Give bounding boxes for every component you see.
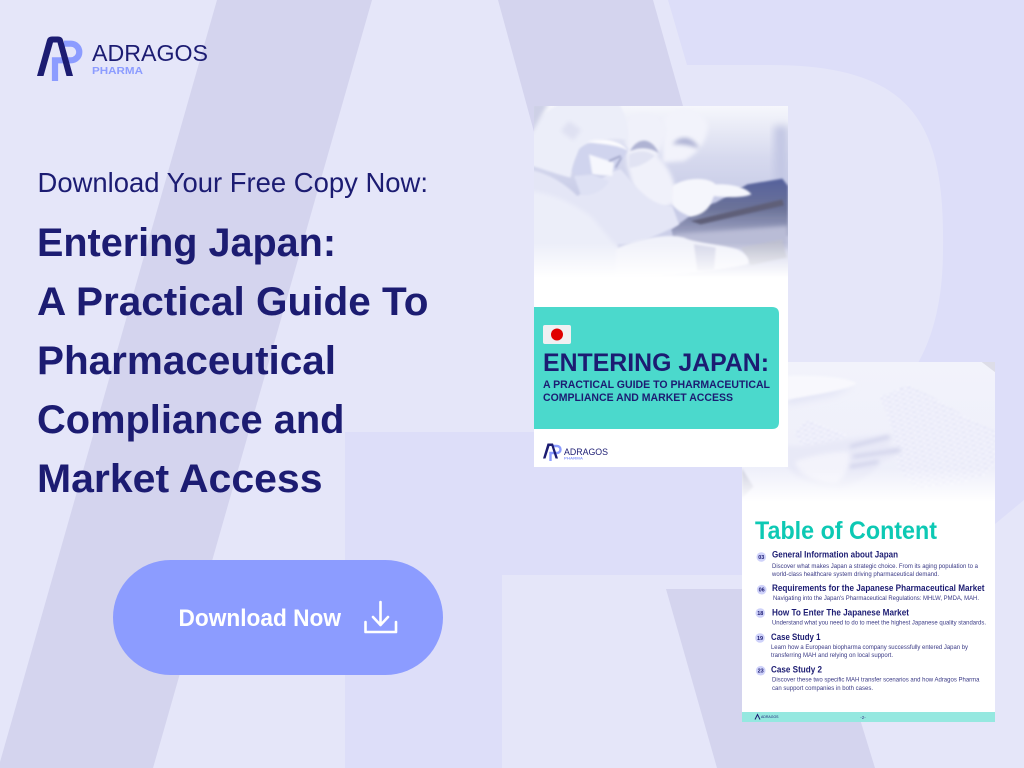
toc entry 06: 06 [759, 588, 765, 594]
photo: gloved hands and pills [742, 362, 995, 495]
eyebrow text: Download Your Free Copy Now: [38, 167, 428, 198]
button label: Download Now [178, 605, 342, 632]
toc entry 19: Case Study 1 [771, 632, 820, 642]
page footer strip [742, 712, 995, 722]
toc entry 23: 23 [758, 669, 764, 675]
toc entry 03: Discover what makes Japan a strategic choice. From its aging population to a [772, 563, 979, 570]
toc entry 23: can support companies in both cases. [772, 685, 873, 692]
cover subtitle: COMPLIANCE AND MARKET ACCESS [543, 392, 733, 404]
cover subtitle [543, 379, 770, 404]
logo subtitle: PHARMA [92, 65, 143, 77]
download button [113, 560, 443, 675]
main heading: Market Access [37, 457, 322, 501]
logo icon [37, 36, 79, 81]
glove arm [672, 179, 751, 217]
page footer strip: ADRAGOS [761, 715, 779, 719]
toc entry 23 [756, 665, 980, 692]
toc entry 19: 19 [757, 636, 763, 642]
toc entry 19: Learn how a European biopharma company successfully entered Japan by [771, 644, 969, 651]
main heading: Compliance and [37, 398, 344, 442]
person 1 body [534, 170, 680, 246]
back page: table of content [742, 362, 995, 722]
background: letter A left leg [0, 0, 372, 768]
main heading: Pharmaceutical [37, 339, 336, 383]
cover title panel [534, 307, 779, 429]
cover logo: PHARMA [564, 456, 583, 460]
toc entry 18: Understand what you need to do to meet the highest Japanese quality standards. [772, 620, 986, 627]
toc entry 18: How To Enter The Japanese Market [772, 608, 909, 618]
cover logo [543, 444, 608, 461]
face and mask [577, 143, 628, 156]
front cover [527, 101, 788, 467]
toc entry 18: 18 [757, 611, 763, 617]
cover title: ENTERING JAPAN: [543, 349, 769, 377]
icon: japan flag [543, 325, 571, 344]
toc entry 19 [755, 632, 969, 659]
person 2 [626, 129, 675, 206]
foreground arm [618, 235, 749, 268]
toc entry 23: Case Study 2 [771, 665, 822, 675]
cover photo: cleanroom workers [534, 106, 788, 272]
toc entry 19: transferring MAH and relying on local support. [771, 652, 893, 659]
icon: download arrow [366, 602, 396, 632]
main heading [37, 221, 428, 501]
cover subtitle: A PRACTICAL GUIDE TO PHARMACEUTICAL [543, 379, 770, 391]
toc entry 06: Navigating into the Japan's Pharmaceutical Regulations: MHLW, PMDA, MAH. [773, 595, 979, 602]
fade to white [534, 247, 788, 278]
toc entry 18 [756, 608, 986, 627]
main heading: Entering Japan: [37, 221, 336, 265]
page footer strip: -2- [860, 715, 866, 720]
toc entry 03 [756, 550, 979, 578]
toc heading: Table of Content [755, 517, 938, 545]
logo wordmark: ADRAGOS [92, 40, 208, 66]
toc entry 06 [757, 583, 984, 602]
logo [37, 36, 208, 81]
tray [671, 179, 788, 239]
main heading: A Practical Guide To [37, 280, 428, 324]
cover logo: ADRAGOS [564, 447, 608, 457]
person 3 [662, 126, 706, 164]
hood [534, 106, 622, 178]
toc entry 06: Requirements for the Japanese Pharmaceutical Market [772, 583, 984, 593]
background: letter P [345, 0, 1024, 768]
toc entry 03: General Information about Japan [772, 550, 898, 560]
background: letter A right leg top [498, 0, 800, 520]
toc entry 03: 03 [758, 555, 764, 561]
background: letter A right leg bottom [666, 589, 875, 768]
toc entry 03: world-class healthcare system driving pharmaceutical demand. [771, 571, 939, 578]
toc entry 23: Discover these two specific MAH transfer scenarios and how Adragos Pharma [772, 677, 980, 684]
